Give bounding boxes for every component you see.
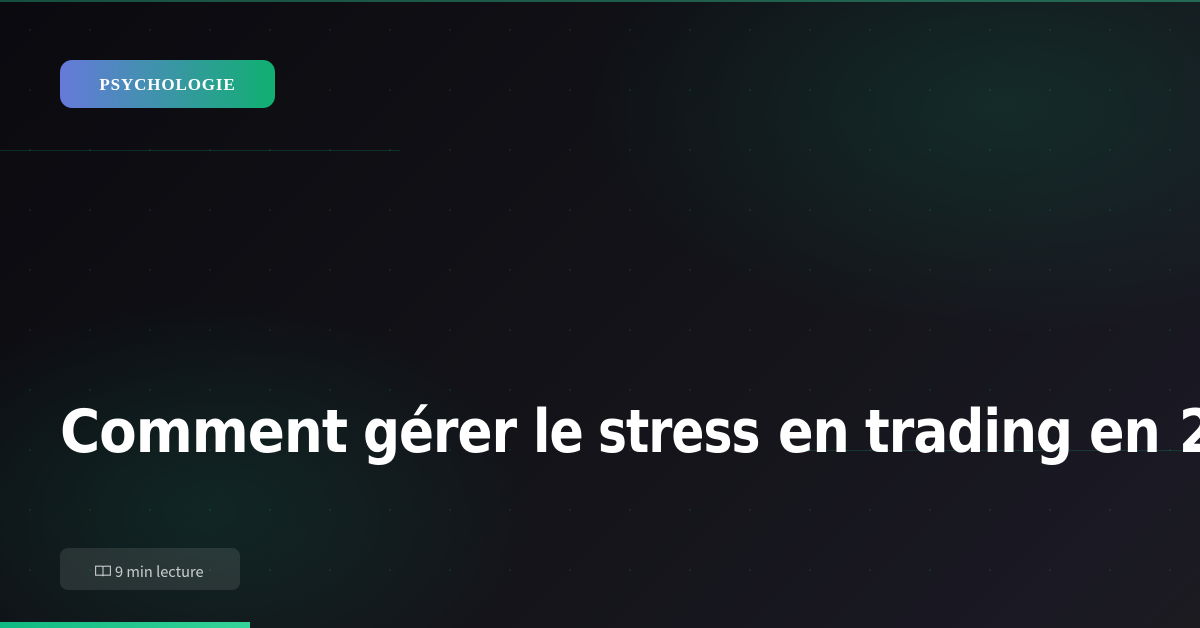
title: stress	[598, 397, 760, 467]
title: en	[1089, 397, 1160, 467]
title: Comment	[60, 397, 347, 467]
reading time chip	[60, 548, 240, 590]
title: gérer	[363, 397, 516, 467]
title: en	[778, 397, 849, 467]
progress bar	[0, 622, 250, 628]
title	[60, 397, 1200, 467]
title: le	[533, 397, 583, 467]
category badge	[60, 60, 275, 108]
icon: open book	[95, 566, 111, 576]
title: trading	[865, 397, 1072, 467]
reading time text: 9 min lecture	[115, 561, 204, 582]
category badge: PSYCHOLOGIE	[99, 75, 236, 94]
